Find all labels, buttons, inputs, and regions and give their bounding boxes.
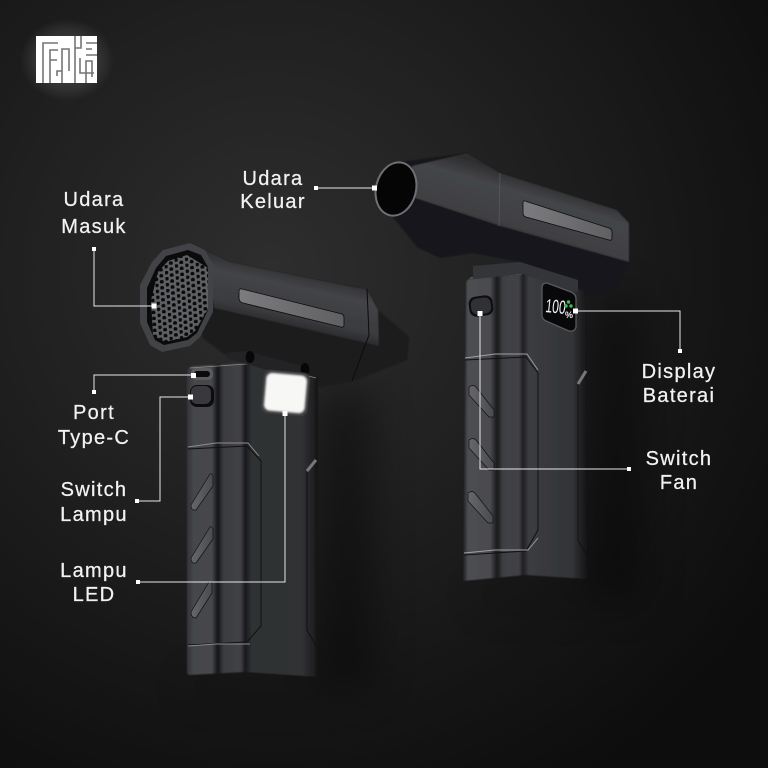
callout: Udara Masuk: Udara (64, 189, 124, 211)
brand logo (20, 19, 114, 101)
device: right blower (369, 153, 629, 581)
callout: Udara Keluar: Udara (243, 168, 303, 190)
power switch (468, 294, 494, 318)
front octagon grille (140, 243, 213, 352)
battery display: % (565, 310, 573, 320)
head upper surface (412, 153, 629, 262)
callout: Lampu LED: Lampu (60, 560, 128, 582)
icon: green fan (564, 300, 573, 308)
callout: Switch Lampu: Lampu (60, 504, 128, 526)
grip panel (188, 443, 318, 649)
device: left blower (140, 243, 409, 677)
battery display: 100 (545, 296, 567, 319)
handle (463, 274, 587, 581)
head upper surface (205, 250, 379, 346)
LED lamp (260, 369, 311, 417)
head body (393, 153, 629, 298)
callout: Switch Lampu (60, 394, 193, 526)
grip ribs (191, 474, 213, 618)
callout: Switch Fan (478, 311, 712, 494)
callout: Udara Keluar (240, 168, 377, 213)
pivot collar (226, 351, 306, 380)
callout: Port Type-C: Port (73, 402, 115, 424)
head body (190, 243, 409, 387)
head seam (499, 173, 500, 226)
callout: Port Type-C: Type-C (58, 427, 130, 449)
callout: Display Baterai: Baterai (643, 385, 715, 407)
callout: Switch Fan: Fan (660, 472, 698, 494)
callout: Udara Masuk: Masuk (61, 216, 127, 238)
side slot (523, 201, 612, 240)
callout: Lampu LED: LED (73, 584, 115, 606)
pivot screws (246, 351, 310, 375)
handle rim top (190, 363, 316, 378)
head rear seam (352, 289, 369, 381)
grip ribs (468, 386, 494, 523)
callout: Switch Fan: Switch (646, 448, 712, 470)
outlet nozzle (369, 157, 423, 221)
battery display (542, 283, 576, 331)
lamp switch (190, 385, 214, 407)
handle rim top (470, 274, 522, 278)
callout: Udara Keluar: Keluar (240, 191, 306, 213)
pivot collar (473, 262, 578, 292)
callout: Switch Lampu: Switch (61, 479, 127, 501)
grip panel (464, 354, 587, 556)
callout: Udara Masuk (61, 189, 156, 308)
callout: Lampu LED (60, 411, 288, 606)
callout: Display Baterai: Display (642, 361, 716, 383)
callout: Display Baterai (573, 308, 716, 407)
callout: Port Type-C (58, 373, 196, 449)
USB-C port (191, 368, 213, 380)
handle (187, 362, 318, 677)
side slot (239, 289, 344, 327)
